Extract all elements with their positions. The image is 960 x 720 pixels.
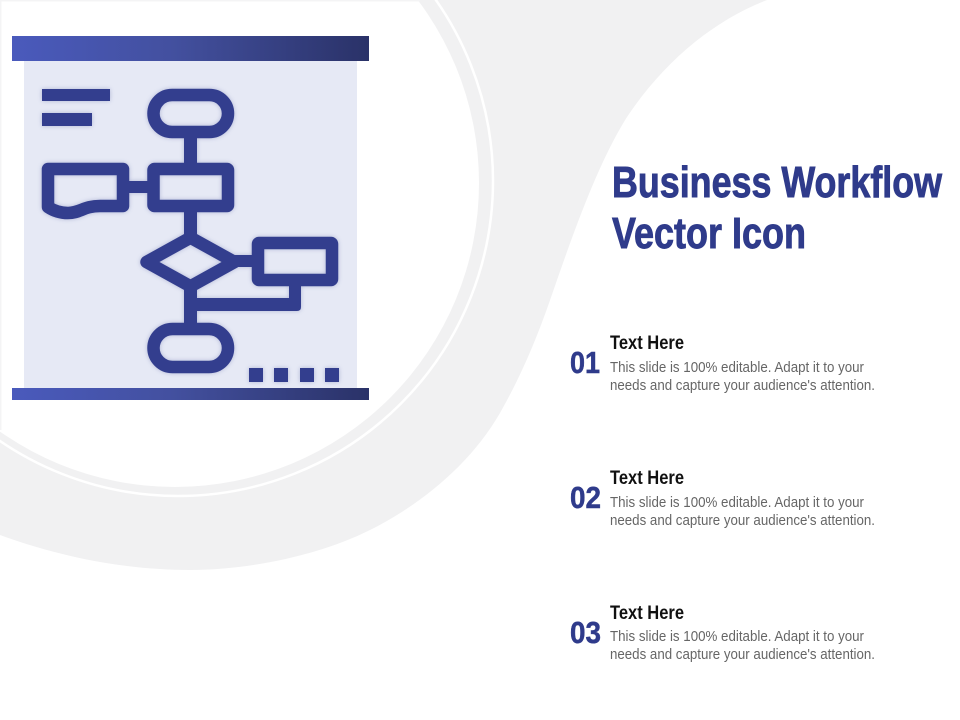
- panel: workflow icon: [12, 36, 369, 400]
- item heading: Text Here: [610, 603, 684, 624]
- item 01: [570, 333, 875, 394]
- item 03: [570, 603, 875, 663]
- item heading: Text Here: [610, 468, 684, 489]
- icon: flowchart: [42, 89, 339, 382]
- item heading: Text Here: [610, 333, 684, 354]
- item description: needs and capture your audience's attention.: [610, 646, 875, 663]
- item description: [610, 494, 875, 529]
- background swoosh: [0, 0, 767, 570]
- item description: [610, 628, 875, 663]
- item description: This slide is 100% editable. Adapt it to your: [610, 359, 864, 376]
- number 02: 02: [570, 480, 601, 515]
- item description: This slide is 100% editable. Adapt it to your: [610, 628, 864, 645]
- item description: [610, 359, 875, 394]
- item description: needs and capture your audience's attention.: [610, 512, 875, 529]
- top gradient bar: [12, 36, 369, 61]
- number 03: 03: [570, 615, 601, 650]
- icon: decision diamond: [146, 238, 234, 286]
- icon: four squares: [249, 368, 339, 382]
- icon: process box: [154, 169, 228, 206]
- icon: side process box: [258, 243, 332, 280]
- item 02: [570, 468, 875, 529]
- number 01: 01: [570, 345, 600, 380]
- panel background: [24, 61, 357, 388]
- title: [612, 158, 943, 258]
- icon: end terminator: [154, 329, 228, 367]
- item description: needs and capture your audience's attention.: [610, 377, 875, 394]
- bottom gradient bar: [12, 388, 369, 400]
- icon: document shape: [48, 169, 123, 213]
- title: Vector Icon: [612, 209, 806, 258]
- item description: This slide is 100% editable. Adapt it to your: [610, 494, 864, 511]
- icon: connectors: [128, 136, 301, 324]
- icon: start terminator: [154, 95, 228, 132]
- icon: text lines: [42, 89, 110, 126]
